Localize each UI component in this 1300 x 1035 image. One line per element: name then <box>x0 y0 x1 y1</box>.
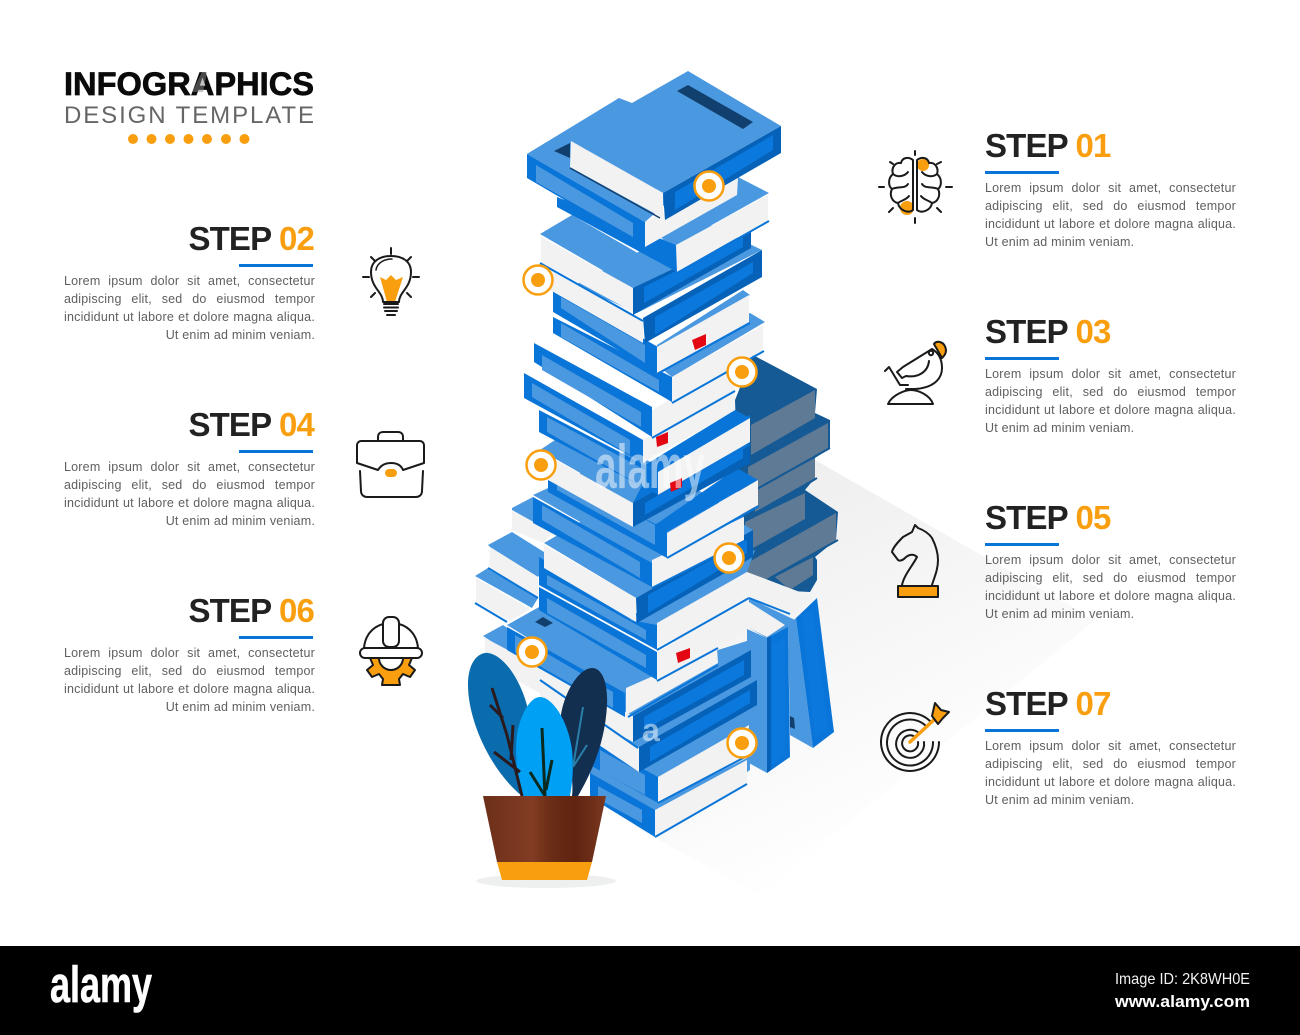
book three <box>557 177 769 273</box>
book with pages to the left and marker two <box>540 415 750 527</box>
step 03 <box>985 313 1236 435</box>
book two <box>527 125 738 247</box>
seven dots <box>128 134 250 144</box>
leaf: left <box>468 653 540 796</box>
step 03 heading: STEP 03 <box>985 313 1111 350</box>
step 07 text: incididunt ut labore et dolore magna aliqua. <box>985 775 1236 789</box>
lowest book <box>590 760 747 837</box>
step 01 text <box>985 181 1236 249</box>
book five <box>540 220 762 343</box>
website: www.alamy.com <box>1114 992 1250 1011</box>
step 02 text: incididunt ut labore et dolore magna aliqua. <box>64 310 315 324</box>
step 05 heading: STEP 05 <box>985 499 1111 536</box>
step 05 text: adipiscing elit, sed do eiusmod tempor <box>985 571 1236 585</box>
step 01 text: adipiscing elit, sed do eiusmod tempor <box>985 199 1236 213</box>
step 04 text: adipiscing elit, sed do eiusmod tempor <box>64 478 315 492</box>
title block <box>64 66 314 144</box>
title: infographics: INFOGRAPHICS <box>64 66 314 102</box>
leaning books on the right <box>747 598 834 773</box>
pot <box>483 796 606 862</box>
book second from bottom <box>590 700 749 803</box>
book seven <box>553 313 765 403</box>
step 05 text: Ut enim ad minim veniam. <box>985 607 1134 621</box>
icon: brain <box>879 151 952 223</box>
step 05 text: incididunt ut labore et dolore magna aliqua. <box>985 589 1236 603</box>
step 04 text: Lorem ipsum dolor sit amet, consectetur <box>64 460 315 474</box>
step 07 <box>985 685 1236 807</box>
step 02 text: Lorem ipsum dolor sit amet, consectetur <box>64 274 315 288</box>
step 04 text: Ut enim ad minim veniam. <box>166 514 315 528</box>
icon: target with arrow <box>881 703 949 771</box>
top book <box>527 71 781 220</box>
step 04 heading: STEP 04 <box>188 406 314 443</box>
book four <box>540 215 751 315</box>
markers <box>518 172 756 758</box>
plant in a pot <box>468 653 616 888</box>
book with L-shaped pages, upper <box>539 550 813 650</box>
step 06 <box>64 592 315 714</box>
long shadow of the book stack <box>640 460 1095 895</box>
step 06 text: adipiscing elit, sed do eiusmod tempor <box>64 664 315 678</box>
step 03 text: incididunt ut labore et dolore magna aliqua. <box>985 403 1236 417</box>
step 02 underline <box>239 264 313 267</box>
step 03 text: Ut enim ad minim veniam. <box>985 421 1134 435</box>
step 07 underline <box>985 729 1059 732</box>
step 07 text: adipiscing elit, sed do eiusmod tempor <box>985 757 1236 771</box>
dark books behind the stack <box>735 355 838 592</box>
step 01 heading: STEP 01 <box>985 127 1111 164</box>
icon: briefcase <box>357 432 424 497</box>
base of lower stack <box>590 640 750 836</box>
red bookmark <box>676 648 690 663</box>
step 07 text: Lorem ipsum dolor sit amet, consectetur <box>985 739 1236 753</box>
left back books <box>475 497 553 622</box>
book with spine left, mid stack <box>533 450 745 588</box>
step 02 heading: STEP 02 <box>188 220 314 257</box>
stock photo watermark <box>192 72 705 748</box>
leaf veins <box>490 688 522 796</box>
step 03 text: Lorem ipsum dolor sit amet, consectetur <box>985 367 1236 381</box>
step 06 text: Ut enim ad minim veniam. <box>166 700 315 714</box>
book six with red bookmark <box>553 287 750 374</box>
pot base <box>497 862 592 880</box>
step 01 text: incididunt ut labore et dolore magna aliqua. <box>985 217 1236 231</box>
step 02 text <box>64 274 315 342</box>
step 01 underline <box>985 171 1059 174</box>
subtitle: design template: DESIGN TEMPLATE <box>64 102 314 129</box>
stock photo watermark: a <box>642 712 660 748</box>
book with pages to the left at mid stack <box>544 476 753 623</box>
step 06 underline <box>239 636 313 639</box>
step 03 text: adipiscing elit, sed do eiusmod tempor <box>985 385 1236 399</box>
step 07 text <box>985 739 1236 807</box>
leaf: right <box>561 668 607 796</box>
footer logo: alamy <box>50 956 152 1013</box>
step 05 text <box>985 553 1236 621</box>
stock photo watermark: alamy <box>595 433 705 502</box>
step 02 text: adipiscing elit, sed do eiusmod tempor <box>64 292 315 306</box>
step 06 text: Lorem ipsum dolor sit amet, consectetur <box>64 646 315 660</box>
book with L-shaped pages, lower <box>539 587 795 681</box>
step 02 <box>64 220 315 342</box>
step 05 <box>985 499 1236 621</box>
icon: microscope <box>885 342 946 404</box>
book with red bookmark, lower <box>539 410 750 496</box>
step 04 underline <box>239 450 313 453</box>
step 07 heading: STEP 07 <box>985 685 1111 722</box>
step 01 <box>985 127 1236 249</box>
step 04 <box>64 406 315 528</box>
step 01 text: Lorem ipsum dolor sit amet, consectetur <box>985 181 1236 195</box>
step 06 text <box>64 646 315 714</box>
footer bar <box>0 946 1300 1035</box>
step 05 text: Lorem ipsum dolor sit amet, consectetur <box>985 553 1236 567</box>
book eight <box>534 343 735 438</box>
step 05 underline <box>985 543 1059 546</box>
step 06 heading: STEP 06 <box>188 592 314 629</box>
white pages of lower left books and their spines <box>483 625 757 772</box>
book with spine left above it <box>548 468 759 558</box>
step 06 text: incididunt ut labore et dolore magna aliqua. <box>64 682 315 696</box>
leaf: middle <box>516 697 573 796</box>
step 04 text <box>64 460 315 528</box>
icon: hard hat with gear <box>360 617 422 685</box>
icon: light bulb <box>363 248 419 315</box>
step 02 text: Ut enim ad minim veniam. <box>166 328 315 342</box>
step 03 text <box>985 367 1236 435</box>
icon: chess knight <box>892 525 938 597</box>
wide flat book with bookmark base <box>507 607 718 717</box>
step 03 underline <box>985 357 1059 360</box>
book with red bookmark, upper <box>524 373 735 463</box>
image id: Image ID: 2K8WH0E <box>1115 971 1250 988</box>
step 07 text: Ut enim ad minim veniam. <box>985 793 1134 807</box>
step 04 text: incididunt ut labore et dolore magna aliqua. <box>64 496 315 510</box>
step 01 text: Ut enim ad minim veniam. <box>985 235 1134 249</box>
